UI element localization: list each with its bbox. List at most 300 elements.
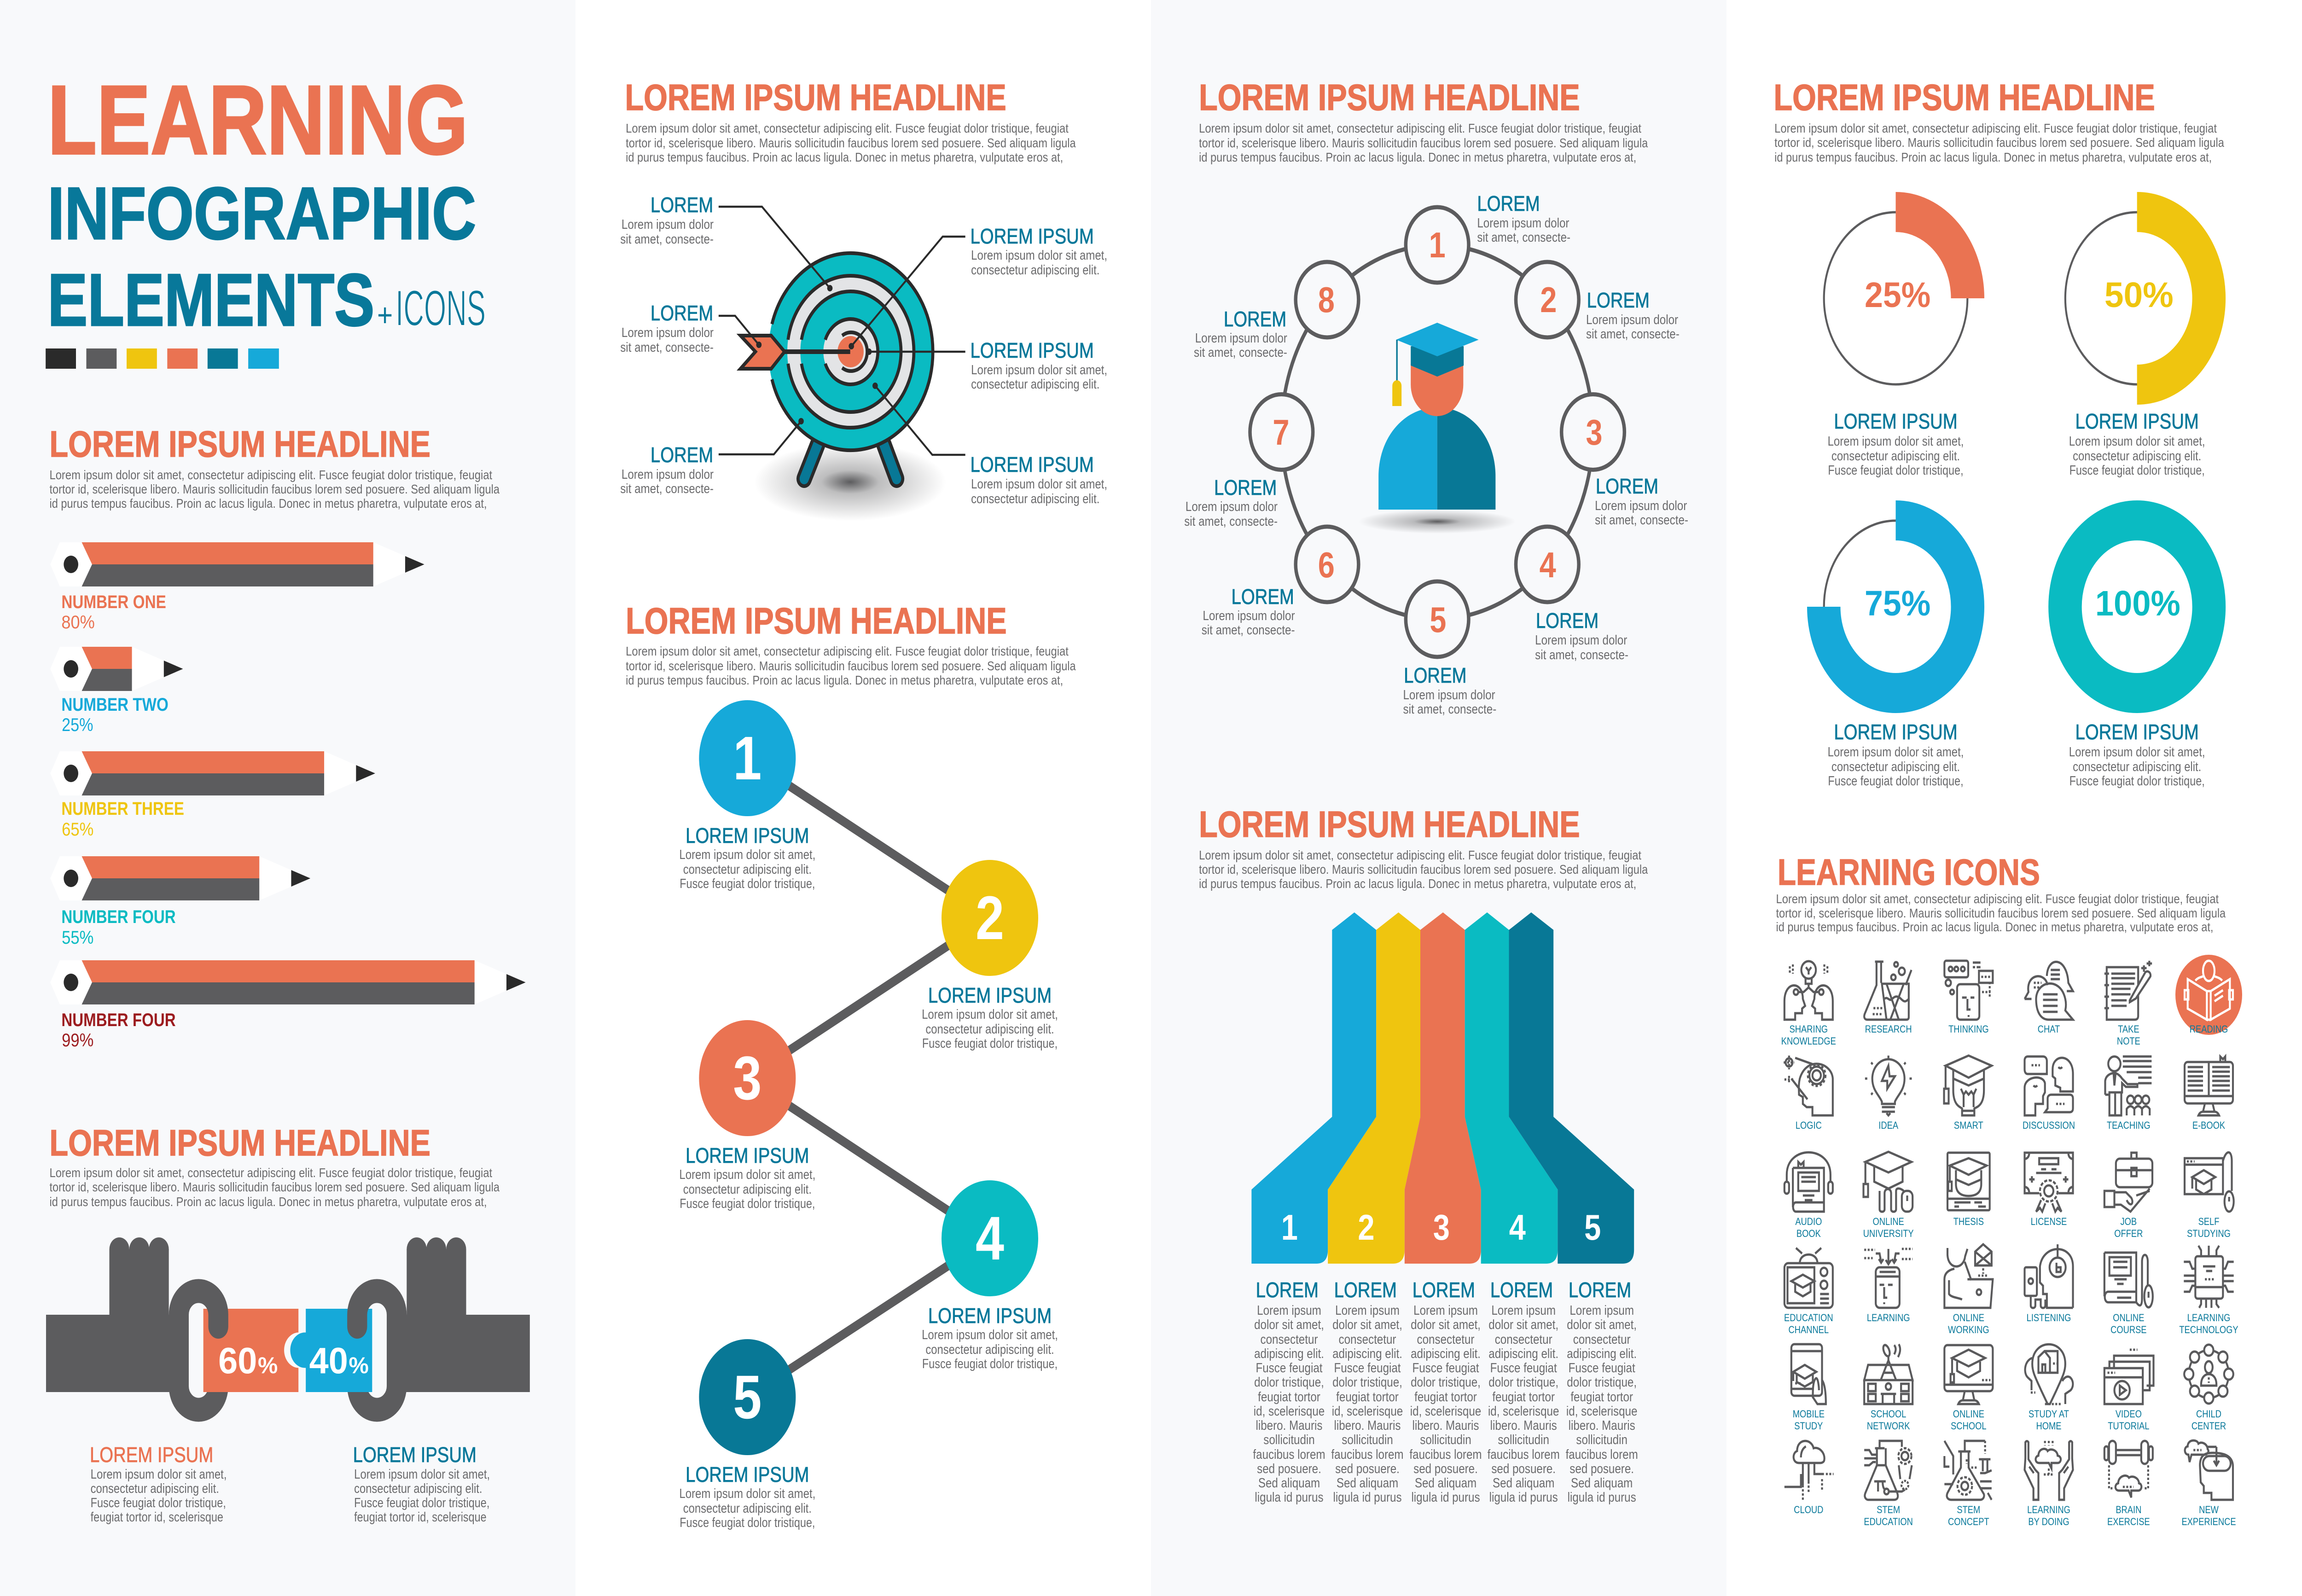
text column 3: sed posuere. [1413,1461,1478,1476]
ring diagram with eight numbered nodes: 1 [1429,225,1446,265]
icon: stem education: EDUCATION [1864,1517,1913,1527]
zigzag step 5: Fusce feugiat dolor tristique, [680,1515,815,1530]
icon: video tutorial [2104,1350,2154,1432]
donut chart 100%: consectetur adipiscing elit. [2073,759,2201,774]
ring labels 1 to 8: Lorem ipsum dolor [1195,331,1287,346]
callout: 60% label: feugiat tortor id, scelerisque [91,1509,223,1525]
pencil bar: number four 55%: NUMBER FOUR [61,906,176,927]
text block: icons intro: tortor id, scelerisque libero. Mauris sollicitudin faucibus lorem sed posuere. Sed aliquam ligula [1776,906,2226,921]
pencil bar: number one 80%: 80% [61,612,95,633]
text block: donuts intro: id purus tempus faucibus. Proin ac lacus ligula. Donec in metus pharetra, vulputate eros at, [1774,151,2212,165]
hands holding puzzle chart: 60 [218,1340,257,1381]
icon: stem concept: STEM [1957,1505,1980,1515]
text block: arrows chart intro [1199,848,1648,891]
donut chart 25%: LOREM IPSUM [1834,410,1958,433]
text column 2: libero. Mauris [1334,1418,1401,1433]
hands holding puzzle chart: % [349,1352,369,1378]
icon: video tutorial: TUTORIAL [2108,1421,2149,1432]
title: ICONS [395,280,486,337]
icon: online university: ONLINE [1873,1217,1904,1227]
text column 5: faucibus lorem [1566,1447,1638,1462]
icon: learning technology: LEARNING [2187,1313,2230,1323]
icon: education channel: EDUCATION [1784,1313,1833,1323]
text column 1: faucibus lorem [1253,1447,1325,1462]
text column 5: id, scelerisque [1566,1404,1637,1419]
text block: hands chart intro [50,1166,500,1209]
ring labels 1 to 8: LOREM [1596,475,1658,498]
text column 2: consectetur [1339,1332,1396,1347]
text column 1: LOREM [1256,1278,1319,1302]
icon: self studying [2185,1152,2234,1239]
pencil bar: number four 99%: NUMBER FOUR [61,1010,176,1030]
zigzag step 4: 4 [976,1204,1004,1273]
hands holding puzzle chart: 40 [309,1340,348,1381]
ring labels 1 to 8: LOREM [1477,192,1540,215]
icon: mobile study: STUDY [1794,1421,1823,1432]
icon: license: LICENSE [2031,1217,2067,1227]
text column 3: sollicitudin [1420,1432,1471,1447]
donut chart 75%: consectetur adipiscing elit. [1831,759,1960,774]
text block: donuts intro [1774,122,2224,165]
icon: cloud [1785,1441,1833,1515]
text column 3: Fusce feugiat [1412,1360,1479,1375]
icon: chat: CHAT [2038,1024,2060,1035]
text column 4: feugiat tortor [1492,1389,1555,1404]
pencil bar: number three 65%: NUMBER THREE [61,798,184,819]
callout: 60% label: consectetur adipiscing elit. [91,1481,219,1496]
callouts: target left labels: LOREM [651,302,713,325]
icon: sharing knowledge [1781,961,1836,1047]
text column 4: Fusce feugiat [1490,1360,1557,1375]
icon: thinking: THINKING [1948,1024,1989,1035]
icon: smart [1944,1056,1992,1131]
text column 5: Sed aliquam [1571,1475,1633,1491]
title [47,65,486,342]
zigzag step 1: Fusce feugiat dolor tristique, [680,876,815,891]
text column 2: sollicitudin [1342,1432,1393,1447]
text column 5: dolor sit amet, [1567,1317,1637,1332]
text column 2: id, scelerisque [1332,1404,1403,1419]
icon: online course [2104,1253,2153,1335]
funnel arrows chart: 5 [1584,1207,1601,1248]
icon: research [1864,962,1912,1035]
zigzag step 2: 2 [976,883,1004,952]
panel: second column [576,0,1151,1596]
icon: sharing knowledge: KNOWLEDGE [1781,1036,1836,1047]
callout: 40% label: feugiat tortor id, scelerisque [354,1509,487,1525]
text column 2: sed posuere. [1335,1461,1400,1476]
icon: mobile study: MOBILE [1793,1409,1825,1420]
callouts: target right labels: LOREM IPSUM [971,339,1094,362]
icon: online university: UNIVERSITY [1863,1229,1914,1239]
donut chart 100%: 100% [2095,584,2180,623]
icon: school network [1864,1344,1913,1432]
icon: learning by doing: LEARNING [2027,1505,2070,1515]
callouts: target right labels: LOREM IPSUM [971,225,1094,248]
ring labels 1 to 8: Lorem ipsum dolor [1403,687,1495,702]
text column 2: ligula id purus [1333,1490,1402,1505]
heading: donuts: LOREM IPSUM HEADLINE [1773,76,2155,118]
text block: target intro: Lorem ipsum dolor sit amet, consectetur adipiscing elit. Fusce feugiat dolor tristique, feugiat [626,122,1069,136]
ring diagram with eight numbered nodes: 5 [1430,600,1446,640]
icon: chat [2025,962,2073,1035]
zigzag step 2: LOREM IPSUM [928,984,1052,1007]
icon: stem education: STEM [1877,1505,1900,1515]
icon: brain exercise: BRAIN [2116,1505,2141,1515]
icon: online working: WORKING [1948,1325,1989,1335]
donut chart 50%: Lorem ipsum dolor sit amet, [2069,434,2205,449]
text column 3: consectetur [1417,1332,1475,1347]
text column 4: LOREM [1490,1278,1553,1302]
ring labels 1 to 8: sit amet, consecte- [1477,230,1570,245]
callout: 60% label: LOREM IPSUM [90,1443,213,1467]
icon: logic: LOGIC [1796,1120,1822,1131]
text column 2: Sed aliquam [1337,1475,1398,1491]
icon: listening [2025,1244,2073,1323]
text column 1: Sed aliquam [1258,1475,1320,1491]
ring labels 1 to 8: sit amet, consecte- [1202,622,1295,638]
donut chart 75%: Fusce feugiat dolor tristique, [1828,773,1964,789]
icon: child center [2184,1345,2233,1432]
panel: left column [0,0,576,1596]
ring diagram with eight numbered nodes: 4 [1540,545,1556,585]
callouts: target right labels: Lorem ipsum dolor sit amet, [971,248,1107,263]
zigzag step 3: Lorem ipsum dolor sit amet, [679,1167,815,1182]
ring labels 1 to 8: LOREM [1224,308,1286,331]
text column 1: Lorem ipsum [1257,1303,1321,1318]
donut chart 25% [1824,212,1968,478]
text block: arrows chart intro: Lorem ipsum dolor sit amet, consectetur adipiscing elit. Fusce feugiat dolor tristique, feugiat [1199,848,1641,863]
title: + [377,297,393,333]
callouts: target right labels: Lorem ipsum dolor sit amet, [971,476,1107,492]
icon: teaching: TEACHING [2107,1120,2151,1131]
hands holding puzzle chart [46,1237,530,1410]
hands holding puzzle chart: % [258,1352,278,1378]
ring labels 1 to 8: Lorem ipsum dolor [1203,608,1295,623]
callouts: target left labels: sit amet, consecte- [620,232,714,247]
text column 4: id, scelerisque [1488,1404,1559,1419]
zigzag step 4: consectetur adipiscing elit. [925,1342,1054,1357]
text column 2: faucibus lorem [1331,1447,1404,1462]
text block: icons intro [1776,892,2226,934]
text column 3: Sed aliquam [1415,1475,1477,1491]
callouts: target left labels: LOREM [651,443,713,467]
icon: learning: LEARNING [1867,1313,1910,1323]
icon: new experience [2181,1440,2236,1527]
donut chart 75%: LOREM IPSUM [1834,720,1958,744]
icon: job offer: OFFER [2114,1229,2143,1239]
text block: icons intro: Lorem ipsum dolor sit amet, consectetur adipiscing elit. Fusce feugiat dolor tristique, feugiat [1776,892,2219,906]
callout: 40% label: Lorem ipsum dolor sit amet, [354,1467,490,1482]
text column 4: ligula id purus [1489,1490,1558,1505]
icon: online working [1944,1244,1993,1335]
text column 4: faucibus lorem [1488,1447,1560,1462]
zigzag step 3: Fusce feugiat dolor tristique, [680,1196,815,1211]
ring diagram with eight numbered nodes: 3 [1586,412,1603,453]
zigzag step 5: 5 [733,1363,762,1432]
donut chart 25%: Fusce feugiat dolor tristique, [1828,463,1964,478]
icon: take note: TAKE [2118,1024,2139,1035]
text block: graduate ring intro: id purus tempus faucibus. Proin ac lacus ligula. Donec in metus pharetra, vulputate eros at, [1199,151,1636,165]
donut chart 50%: LOREM IPSUM [2075,410,2199,433]
pencil bar: number four 55% [50,856,310,948]
zigzag connector [747,758,990,1397]
ring labels 1 to 8: sit amet, consecte- [1586,326,1680,342]
text column 3: faucibus lorem [1409,1447,1482,1462]
ring labels 1 to 8: LOREM [1232,585,1294,609]
icon: online school [1944,1345,1993,1432]
text column 5: sed posuere. [1570,1461,1634,1476]
donut chart 75%: 75% [1865,584,1930,623]
icon: research: RESEARCH [1865,1024,1912,1035]
text column 1: libero. Mauris [1256,1418,1323,1433]
icon: self studying: STUDYING [2187,1229,2231,1239]
ring labels 1 to 8: Lorem ipsum dolor [1186,499,1278,514]
donut chart 50%: Fusce feugiat dolor tristique, [2069,463,2205,478]
funnel arrows chart: 4 [1509,1207,1526,1248]
donut chart 25%: Lorem ipsum dolor sit amet, [1828,434,1964,449]
icon: brain exercise: EXERCISE [2107,1517,2150,1527]
icon: thesis [1947,1153,1990,1227]
funnel arrows chart: 1 [1281,1207,1298,1248]
text block: donuts intro: tortor id, scelerisque libero. Mauris sollicitudin faucibus lorem sed posuere. Sed aliquam ligula [1774,136,2224,150]
text column 3: feugiat tortor [1414,1389,1477,1404]
heading: graduate ring: LOREM IPSUM HEADLINE [1199,76,1580,118]
icon: thesis: THESIS [1953,1217,1984,1227]
icon: audio book: BOOK [1796,1229,1821,1239]
text column 4: libero. Mauris [1490,1418,1557,1433]
callouts: target left labels: Lorem ipsum dolor [622,467,714,482]
icon: smart: SMART [1954,1120,1983,1131]
text column 4: consectetur [1495,1332,1552,1347]
callouts: target right labels: Lorem ipsum dolor sit amet, [971,362,1107,377]
text column 1: consectetur [1261,1332,1318,1347]
ring labels 1 to 8 [1184,192,1688,717]
zigzag step 3 [679,1020,815,1211]
ring labels 1 to 8: sit amet, consecte- [1535,647,1628,662]
icon: e-book [2185,1056,2233,1131]
icon: learning by doing [2025,1441,2073,1527]
icon: teaching [2105,1056,2151,1131]
text column 1: adipiscing elit. [1254,1346,1324,1361]
callouts: target right labels: consectetur adipiscing elit. [971,377,1099,392]
text column 3: LOREM [1413,1278,1475,1302]
text column 3: id, scelerisque [1410,1404,1481,1419]
text block: zigzag intro: id purus tempus faucibus. Proin ac lacus ligula. Donec in metus pharetra, vulputate eros at, [626,673,1063,688]
zigzag step 3: 3 [733,1044,762,1113]
donut chart 100%: Lorem ipsum dolor sit amet, [2069,744,2205,760]
zigzag step 1: LOREM IPSUM [686,824,809,847]
text column 1: sollicitudin [1263,1432,1315,1447]
text column 1: dolor sit amet, [1254,1317,1324,1332]
text block: target intro: id purus tempus faucibus. Proin ac lacus ligula. Donec in metus pharetra, vulputate eros at, [626,151,1063,165]
icon: self studying: SELF [2198,1217,2219,1227]
text block: target intro: tortor id, scelerisque libero. Mauris sollicitudin faucibus lorem sed posuere. Sed aliquam ligula [626,136,1076,151]
text column 4: Sed aliquam [1493,1475,1554,1491]
panel: third column [1151,0,1726,1596]
text column 5 [1566,1278,1638,1505]
text column 1: Fusce feugiat [1256,1360,1323,1375]
pencil bar: number one 80% [50,542,424,633]
icon: child center: CENTER [2192,1421,2226,1432]
icon: audio book [1785,1152,1833,1239]
text column 2: adipiscing elit. [1332,1346,1402,1361]
heading: learning icons: LEARNING ICONS [1778,851,2040,893]
icon: learning technology: TECHNOLOGY [2179,1325,2238,1335]
text block: hands chart intro: tortor id, scelerisque libero. Mauris sollicitudin faucibus lorem sed posuere. Sed aliquam ligula [50,1180,500,1195]
icon: online school: SCHOOL [1951,1421,1987,1432]
text block: pencil chart intro: id purus tempus faucibus. Proin ac lacus ligula. Donec in metus pharetra, vulputate eros at, [50,497,487,511]
ring labels 1 to 8: sit amet, consecte- [1194,345,1287,360]
icon: study at home [2025,1344,2073,1432]
ring labels 1 to 8: LOREM [1214,476,1277,499]
text column 5: feugiat tortor [1570,1389,1633,1404]
icon: job offer: JOB [2121,1217,2137,1227]
text column 5: adipiscing elit. [1567,1346,1637,1361]
icon: reading (highlighted) [2175,955,2242,1035]
icon: license [2025,1153,2073,1227]
callout: 40% label [353,1443,490,1525]
callouts: target left labels: sit amet, consecte- [620,481,714,496]
icon: school network: NETWORK [1867,1421,1910,1432]
zigzag step 5: LOREM IPSUM [686,1463,809,1486]
text column 5: dolor tristique, [1567,1375,1637,1390]
text column 1: sed posuere. [1257,1461,1321,1476]
zigzag step 1: consectetur adipiscing elit. [683,862,812,877]
text block: pencil chart intro: tortor id, scelerisque libero. Mauris sollicitudin faucibus lorem sed posuere. Sed aliquam ligula [50,482,500,497]
text block: donuts intro: Lorem ipsum dolor sit amet, consectetur adipiscing elit. Fusce feugiat dolor tristique, feugiat [1774,122,2217,136]
text block: hands chart intro: Lorem ipsum dolor sit amet, consectetur adipiscing elit. Fusce feugiat dolor tristique, feugiat [50,1166,492,1180]
callouts: target left labels: LOREM [651,193,713,217]
text column 3: dolor tristique, [1411,1375,1481,1390]
pencil bar: number four 99%: 99% [62,1030,93,1050]
callouts: target right labels: consectetur adipiscing elit. [971,262,1099,278]
text column 3 [1409,1278,1482,1505]
text block: zigzag intro [626,644,1076,688]
text column 2 [1331,1278,1404,1505]
zigzag step 2: Fusce feugiat dolor tristique, [922,1036,1058,1051]
text column 5: consectetur [1573,1332,1631,1347]
callout: 60% label: Fusce feugiat dolor tristique, [91,1495,226,1510]
text column 3: ligula id purus [1411,1490,1480,1505]
funnel arrows chart [1251,912,1634,1264]
zigzag step 2: Lorem ipsum dolor sit amet, [922,1007,1058,1022]
text column 4: sollicitudin [1498,1432,1549,1447]
ring labels 1 to 8: Lorem ipsum dolor [1477,215,1570,231]
pencil bar: number three 65% [50,751,375,840]
icon: video tutorial: VIDEO [2116,1409,2142,1420]
icon: sharing knowledge: SHARING [1790,1024,1828,1035]
text column 3: adipiscing elit. [1411,1346,1481,1361]
ring labels 1 to 8: LOREM [1536,609,1599,633]
ring diagram with eight numbered nodes: 2 [1540,280,1557,320]
icon: learning technology [2179,1246,2238,1335]
ring labels 1 to 8: Lorem ipsum dolor [1535,633,1627,648]
donut chart 75% [1824,520,1968,789]
zigzag step 4: Lorem ipsum dolor sit amet, [922,1327,1058,1342]
zigzag step 4: Fusce feugiat dolor tristique, [922,1356,1058,1371]
zigzag step 5: Lorem ipsum dolor sit amet, [679,1486,815,1501]
ring labels 1 to 8: sit amet, consecte- [1403,702,1496,717]
ring labels 1 to 8: Lorem ipsum dolor [1586,312,1678,327]
text column 5: libero. Mauris [1569,1418,1635,1433]
title: ELEMENTS [47,259,374,342]
donut chart 100%: Fusce feugiat dolor tristique, [2069,773,2205,789]
donut chart 50%: 50% [2104,276,2174,315]
zigzag step 1 [679,700,815,891]
donut chart 50%: consectetur adipiscing elit. [2073,448,2201,464]
icon: learning [1864,1249,1913,1323]
ring labels 1 to 8: Lorem ipsum dolor [1595,498,1687,513]
icon: stem education [1864,1441,1913,1527]
donut chart 75%: Lorem ipsum dolor sit amet, [1828,744,1964,760]
text column 4: Lorem ipsum [1491,1303,1556,1318]
text block: graduate ring intro: Lorem ipsum dolor sit amet, consectetur adipiscing elit. Fusce feugiat dolor tristique, feugiat [1199,122,1641,136]
text column 5: Fusce feugiat [1569,1360,1635,1375]
text column 5: LOREM [1569,1278,1631,1302]
heading: arrows chart: LOREM IPSUM HEADLINE [1199,803,1580,845]
zigzag step 2 [922,860,1058,1051]
callout: 60% label: Lorem ipsum dolor sit amet, [91,1467,227,1482]
icon: study at home: HOME [2036,1421,2061,1432]
icon: idea [1865,1056,1912,1131]
icon: discussion [2023,1056,2075,1131]
icon: thinking [1944,961,1993,1035]
callout: 40% label: consectetur adipiscing elit. [354,1481,482,1496]
icon: study at home: STUDY AT [2029,1409,2069,1420]
zigzag step 2: consectetur adipiscing elit. [925,1021,1054,1037]
text column 3: dolor sit amet, [1411,1317,1481,1332]
zigzag step 1: 1 [733,724,762,793]
callouts: target left labels [620,193,965,496]
zigzag step 3: LOREM IPSUM [686,1144,809,1167]
text column 3: libero. Mauris [1412,1418,1479,1433]
callouts: target left labels: sit amet, consecte- [620,340,714,355]
funnel arrows chart: 2 [1358,1207,1375,1248]
zigzag step 3: consectetur adipiscing elit. [683,1182,812,1197]
ring diagram with eight numbered nodes: 6 [1318,545,1335,585]
icon: stem concept: CONCEPT [1948,1517,1989,1527]
icon: discussion: DISCUSSION [2023,1120,2075,1131]
icon: online working: ONLINE [1953,1313,1984,1323]
callouts: target left labels: Lorem ipsum dolor [622,217,714,232]
donut chart 100% [2065,520,2209,789]
donut chart 100%: LOREM IPSUM [2075,720,2199,744]
text column 2: feugiat tortor [1336,1389,1399,1404]
icon: new experience: EXPERIENCE [2181,1517,2236,1527]
donut chart 25%: consectetur adipiscing elit. [1831,448,1960,464]
colour swatches [46,348,279,369]
text column 1: id, scelerisque [1254,1404,1325,1419]
text column 2: Fusce feugiat [1334,1360,1401,1375]
callout: 60% label [90,1443,227,1525]
zigzag step 4 [922,1180,1058,1371]
funnel arrows chart: 3 [1433,1207,1450,1248]
donut chart 50% [2065,212,2209,478]
text block: arrows chart intro: id purus tempus faucibus. Proin ac lacus ligula. Donec in metus pharetra, vulputate eros at, [1199,877,1636,891]
pencil bar: number two 25% [50,647,183,735]
heading: zigzag: LOREM IPSUM HEADLINE [626,600,1007,641]
pencil bar: number four 99% [50,960,526,1050]
text column 2: dolor tristique, [1332,1375,1402,1390]
text block: hands chart intro: id purus tempus faucibus. Proin ac lacus ligula. Donec in metus pharetra, vulputate eros at, [50,1195,487,1209]
icon: online course: COURSE [2110,1325,2147,1335]
icon: school network: SCHOOL [1871,1409,1906,1420]
text block: zigzag intro: tortor id, scelerisque libero. Mauris sollicitudin faucibus lorem sed posuere. Sed aliquam ligula [626,659,1076,673]
heading: pencil chart: LOREM IPSUM HEADLINE [50,423,430,464]
icon: reading (highlighted): READING [2190,1024,2228,1035]
icon: cloud: CLOUD [1794,1505,1823,1515]
